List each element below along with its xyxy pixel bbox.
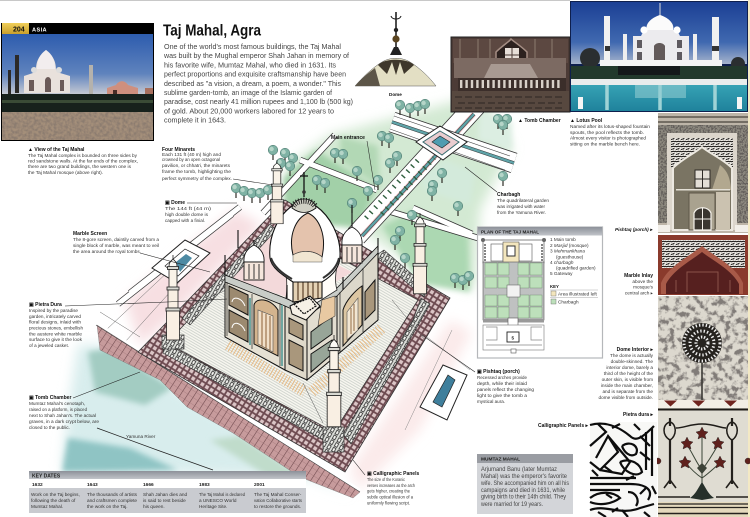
- Mumtaz text: [480, 467, 569, 508]
- lower right pavilion pool: [420, 365, 467, 420]
- intro text: his favorite wife, Mumtaz Mahal, who died in 1631. Its: [164, 60, 336, 70]
- callout: pietra dura: garden, intricately carved: [29, 314, 81, 319]
- plan legend: 3 Mehmankhana: [550, 248, 585, 254]
- callout: lotus pool: spouts, the pool reflects the tomb.: [570, 130, 644, 135]
- callout: view of the Taj Mahal: red sandstone walls. At the far ends of the complex,: [28, 158, 138, 164]
- callout: calligraphic panels: verses increases as the arch: [367, 483, 415, 488]
- plan legend: Area illustrated left: [558, 292, 598, 296]
- plan legend: [550, 237, 598, 304]
- arches and vases: [664, 422, 737, 440]
- label: pietra dura photo: Pietra dura ▸: [623, 412, 653, 418]
- plan legend: 4 charbagh: [550, 260, 574, 265]
- callout: tomb chamber photo caption: ▲ Tomb Chamber: [518, 118, 561, 124]
- cross axis road: [392, 122, 514, 163]
- callout: view of the Taj Mahal: The Taj Mahal complex is bounded on three sides by: [28, 153, 138, 158]
- Taj building body: [225, 172, 378, 380]
- timeline entries: a UNESCO World: [199, 498, 237, 503]
- callout: dome interior: The dome is actually: [610, 353, 654, 358]
- callout: view of the Taj Mahal: there are two grand buildings, the western one is: [28, 164, 132, 169]
- callout: pietra dura: of a jeweled casket.: [29, 343, 69, 348]
- timeline entries: 1666: [143, 482, 154, 488]
- Mumtaz text: campaigns and died in 1631, while: [481, 488, 566, 494]
- plan drawing: 5: [512, 336, 514, 340]
- callout: pietra dura: [29, 302, 83, 348]
- pishtaq label: Pishtaq (porch) ▸: [615, 227, 653, 232]
- intro text: perfect proportions and exquisite craftsmanship have been: [164, 70, 346, 78]
- timeline entries: The Taj Mahal Conser-: [254, 492, 302, 497]
- Mumtaz text: were married for 19 years.: [480, 502, 543, 508]
- callout: pietra dura: ▣ Pietra Dura: [29, 302, 62, 308]
- key dates heading: [29, 471, 306, 480]
- callout: calligraphic panels: gets higher, creating the: [367, 488, 410, 494]
- chhatri right: [342, 205, 362, 263]
- plan of the Taj Mahal panel: [478, 227, 602, 358]
- callout: marble screen: [73, 231, 159, 254]
- plan legend: 2 Masjid (mosque): [550, 243, 589, 248]
- photo: view of the Taj Mahal with page header: [1, 23, 154, 141]
- photo: marble inlay arch: [624, 235, 748, 296]
- main axis road: [356, 92, 488, 236]
- intro text: was built by the Mughal emperor Shah Jahan in memory of: [163, 51, 349, 60]
- plan heading: PLAN OF THE TAJ MAHAL: [481, 230, 539, 236]
- callout: dome: ▣ Dome: [165, 200, 185, 206]
- callout: pietra dura: Inspired by the paradise: [29, 308, 78, 313]
- timeline entries: Shah Jahan dies and: [143, 492, 187, 497]
- timeline entries: and craftsmen complete: [87, 498, 137, 503]
- callout: pietra dura: surface to give it the look: [29, 337, 83, 342]
- callout: pishtaq: panels reflect the changing: [477, 387, 534, 392]
- callout: pishtaq: Recessed arches provide: [477, 375, 527, 380]
- key dates panel: [29, 471, 306, 513]
- timeline entries: 1632: [32, 482, 43, 488]
- callout: dome interior: [599, 347, 654, 400]
- river: Yamuna: [62, 345, 350, 495]
- cutaway interior: [285, 257, 340, 326]
- callout: charbagh: was irrigated with water: [497, 204, 545, 209]
- intro text: of gold. About 20,000 workers labored for 12 years to: [164, 106, 334, 116]
- parapets: [225, 246, 378, 316]
- intro text: [163, 42, 353, 124]
- callout: tomb chamber: raised on a platform, is placed: [29, 407, 87, 412]
- marble inlay label: [624, 273, 654, 296]
- callout: four minarets: crowned by an open octagonal: [162, 157, 220, 162]
- callout: dome interior: interior dome, barely a: [606, 365, 653, 370]
- timeline entries: following the death of: [31, 498, 76, 503]
- timeline entries: vation Collaborative starts: [254, 498, 303, 503]
- callout: lotus pool: ▲ Lotus Pool: [570, 118, 603, 124]
- callout: marble screen: the area around the royal tombs.: [73, 249, 141, 254]
- callout: calligraphic panels: subtle optical illusion of a: [367, 494, 413, 500]
- callout: view of the Taj Mahal: [28, 147, 138, 175]
- timeline entries: the work on the Taj.: [87, 504, 128, 509]
- callout: tomb chamber: ▣ Tomb Chamber: [29, 395, 71, 401]
- callout: dome interior: and is separate from the: [602, 389, 653, 394]
- pink floor behind tomb: [228, 232, 352, 302]
- left pavilion pool: [152, 240, 210, 283]
- photo: pietra dura flowers: [655, 408, 750, 517]
- marble terrace: [167, 225, 418, 432]
- callout: lotus pool: [570, 118, 650, 146]
- callout: calligraphic panels: uniformly flowing script.: [367, 500, 410, 506]
- callout: dome: The 144 ft (44 m): [165, 206, 212, 211]
- callout: tomb chamber: [29, 395, 99, 430]
- callout: four minarets: frame the tomb, highlighting the: [162, 169, 231, 174]
- timeline entries: 1643: [87, 482, 98, 488]
- page number tab: 204: [13, 26, 25, 34]
- callout: dome: capped with a finial.: [165, 218, 205, 223]
- photo: lotus pool: [570, 1, 748, 112]
- callout: four minarets: perfect symmetry of the complex.: [162, 176, 232, 181]
- callout: view of the Taj Mahal: ▲ View of the Taj Mahal: [28, 147, 85, 153]
- dome caption: Dome: [389, 92, 402, 97]
- callout: tomb chamber: Mumtaz Mahal's cenotaph,: [29, 401, 85, 406]
- callout: calligraphic panels: [367, 471, 419, 506]
- trees: [231, 99, 512, 290]
- intro text: complete it in 1643.: [164, 116, 226, 124]
- callout: four minarets: [162, 147, 232, 181]
- timeline entries: Work on the Taj begins,: [31, 492, 80, 497]
- callout: lotus pool: Almost every visitor is photographed: [570, 136, 646, 140]
- title: Taj Mahal, Agra: [163, 22, 261, 40]
- callout: tomb chamber: closed to the public.: [29, 425, 70, 430]
- callout: pietra dura: the austere white marble: [29, 332, 82, 336]
- plan legend: Charbagh: [558, 300, 579, 304]
- timeline entries: 2001: [254, 482, 265, 488]
- callout: dome interior: outer skin, is visible from: [602, 377, 653, 382]
- callout: pishtaq: ▣ Pishtaq (porch): [477, 369, 520, 375]
- photo: calligraphic panels: [590, 422, 657, 517]
- marble inlay label: central arch ▸: [625, 290, 654, 296]
- marble inlay label: above the: [632, 279, 653, 284]
- callout: dome: high double dome is: [165, 212, 209, 217]
- callout: four minarets: Four Minarets: [162, 147, 195, 153]
- callout: charbagh: from the Yamuna River.: [497, 210, 546, 215]
- section label: ASIA: [32, 28, 47, 34]
- callout: dome interior: Dome Interior ▸: [617, 347, 653, 353]
- Mumtaz text: giving birth to their 14th child. They: [481, 494, 566, 500]
- terrace railing: [163, 224, 430, 444]
- garden wash: green lawns and pink ground: [125, 95, 512, 490]
- charbagh central pool: [416, 126, 467, 160]
- plan legend: (quadrified garden): [556, 266, 596, 270]
- timeline entries: The thousands of artists: [87, 492, 138, 497]
- main dome cutaway: [270, 172, 340, 282]
- photo: tomb chamber: [451, 37, 570, 112]
- Mumtaz text: Arjumand Banu (later Mumtaz: [481, 467, 557, 473]
- intro text: sublime garden-tomb, an image of the Islamic garden of: [164, 88, 332, 97]
- callout: view of the Taj Mahal: the Taj Mahal mosque (above right).: [28, 170, 103, 175]
- callout: charbagh: The quadrilateral garden: [497, 198, 549, 203]
- illustration: Taj Mahal cutaway complex: [62, 92, 514, 498]
- timeline entries: his queen.: [143, 504, 165, 509]
- marble inlay label: Marble Inlay: [624, 273, 653, 279]
- callout: pishtaq: depth, while their inlaid: [477, 381, 527, 386]
- plan legend: 5 Gateway: [550, 271, 573, 276]
- callout: calligraphic panels: The size of the Koranic: [367, 477, 406, 482]
- callout: pishtaq: light to give the tomb a: [477, 393, 527, 398]
- shadow hatching on terrace: [198, 290, 425, 423]
- callout: marble screen: The 8-gore screen, daintily carved from a: [73, 237, 159, 242]
- callout: four minarets: Each 131 ft (40 m) high and: [162, 152, 221, 157]
- timeline entries: Mumtaz Mahal.: [31, 504, 63, 509]
- page number tab: [2, 23, 29, 34]
- callout: pietra dura: floral designs, inlaid with: [29, 320, 81, 324]
- marble inlay label: mosque's: [633, 284, 654, 290]
- front and right facade arches: [289, 268, 375, 372]
- callout: dome interior: double-skinned. The: [611, 359, 653, 364]
- plan legend: KEY: [550, 284, 559, 289]
- callout: dome interior: third of the height of the: [604, 371, 653, 376]
- intro text: paradise, cost nearly 41 million rupees and 1,100 lb (500 kg): [164, 97, 353, 106]
- gardens: paths and channels: [100, 92, 514, 430]
- photo: pishtaq porch: [615, 113, 748, 233]
- key dates heading: KEY DATES: [32, 474, 61, 480]
- river: Yamuna: Yamuna River: [126, 434, 156, 439]
- callout: lotus pool: sitting on the marble bench here.: [570, 142, 640, 146]
- intro text: One of the world's most famous buildings, the Taj Mahal: [164, 42, 341, 51]
- callout: dome interior: dome visible from outside.: [599, 395, 653, 400]
- timeline entries: [31, 482, 303, 509]
- callout: calligraphic panels: ▣ Calligraphic Panels: [367, 471, 419, 477]
- intro text: described as "a vision, a dream, a poem, a wonder." This: [164, 79, 341, 88]
- callout: marble screen: single block of marble, was meant to veil: [73, 243, 159, 248]
- Mumtaz heading: MUMTAZ MAHAL: [481, 456, 520, 462]
- callout: pietra dura: precious stones, embellish: [29, 326, 83, 330]
- callout: lotus pool: Named after its lotus-shaped fountain: [570, 124, 650, 129]
- four minarets: [162, 160, 427, 452]
- timeline entries: The Taj Mahal is declared: [199, 492, 245, 497]
- chhatri left: [225, 230, 378, 298]
- callout: main entrance: Main entrance: [331, 135, 365, 141]
- callout: tomb chamber: next to Shah Jahan's. The actual: [29, 413, 96, 418]
- callout: charbagh: [497, 192, 549, 215]
- callout: pishtaq: mystical aura.: [477, 399, 505, 404]
- callout: pishtaq: [477, 369, 534, 404]
- Mumtaz text: wife. She accompanied him on all his: [480, 481, 569, 487]
- plan legend: 1 Main tomb: [550, 237, 576, 242]
- photo: marble detail (dome interior): [658, 296, 748, 408]
- callout: tomb chamber: graves, in a dark crypt below, are: [29, 419, 99, 424]
- plan legend: (guesthouse): [556, 254, 584, 260]
- callout: four minarets: pavilion, or chhatri, the minarets: [162, 163, 231, 168]
- timeline entries: to restore the grounds.: [254, 504, 301, 509]
- riverfront wall: [97, 325, 360, 498]
- callout: marble screen: Marble Screen: [73, 231, 107, 237]
- illustration: dome finial close-up: [355, 12, 436, 97]
- callout: charbagh: Charbagh: [497, 192, 520, 198]
- Mumtaz Mahal panel: [477, 454, 573, 514]
- timeline entries: 1983: [199, 482, 210, 488]
- left facade arches: [227, 282, 282, 366]
- marble screen platform: red sandstone lattice: [138, 200, 450, 472]
- timeline entries: is said to rest beside: [143, 498, 186, 503]
- callout: dome interior: inside the main chamber,: [601, 383, 653, 388]
- timeline entries: Heritage Site.: [199, 504, 227, 509]
- label: calligraphic panels photo: Calligraphic Panels ▸: [538, 423, 588, 429]
- leader lines: [65, 141, 497, 475]
- Mumtaz text: Mahal) was the emperor's favorite: [481, 474, 568, 480]
- callout: dome: [165, 200, 212, 223]
